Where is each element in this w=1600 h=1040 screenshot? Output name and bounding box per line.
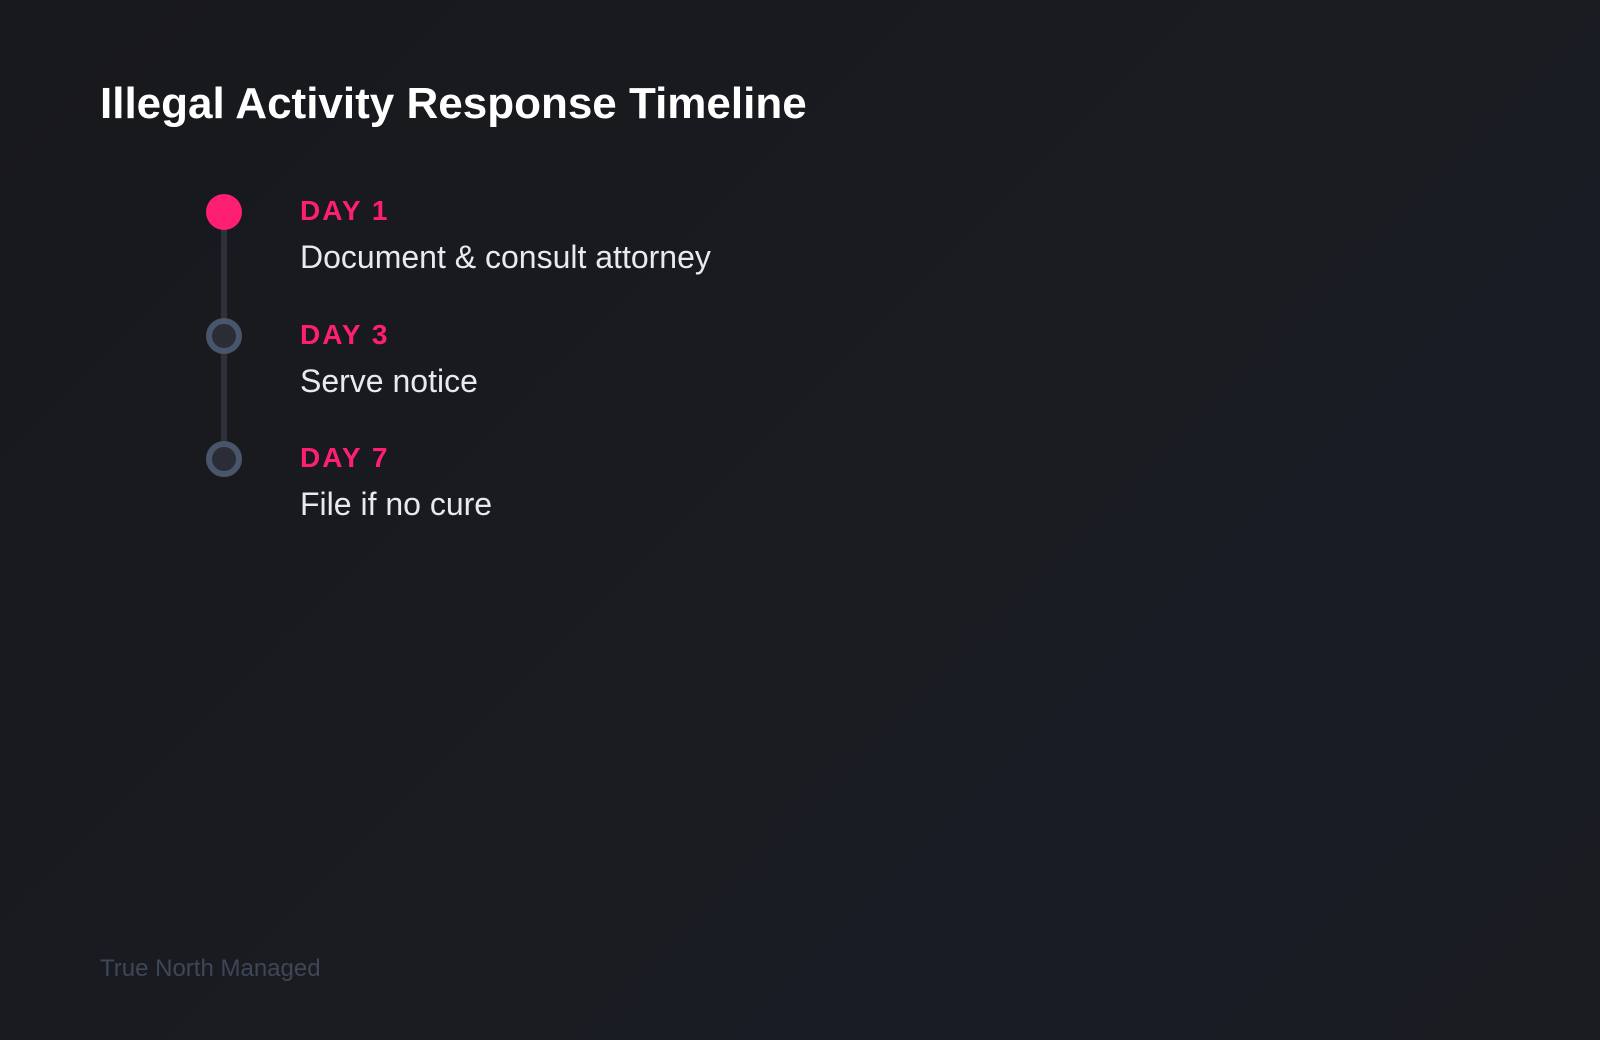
footer: True North Managed — [100, 955, 321, 982]
step 3 text: File if no cure — [300, 486, 492, 522]
step 2 text: Serve notice — [300, 363, 478, 399]
marker: day 7 — [206, 441, 242, 477]
timeline — [206, 194, 711, 522]
title: Illegal Activity Response Timeline — [100, 79, 807, 128]
connector line — [221, 212, 227, 462]
marker: day 1 — [206, 194, 242, 230]
marker: day 3 — [206, 318, 242, 354]
step 1 text: Document & consult attorney — [300, 239, 711, 275]
step 1 label: DAY 1 — [300, 195, 389, 226]
step 2 label: DAY 3 — [300, 319, 389, 350]
step 3 label: DAY 7 — [300, 442, 389, 473]
